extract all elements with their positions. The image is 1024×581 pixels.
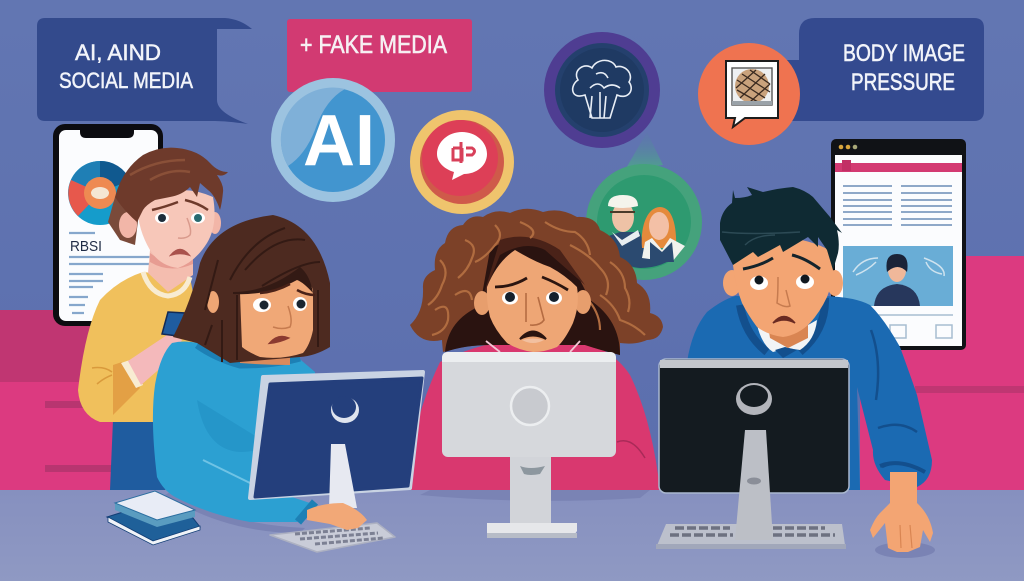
brows xyxy=(152,200,208,210)
monitor stand right xyxy=(735,430,773,540)
brows xyxy=(260,284,315,295)
banner: AI and social media: AI, AIND xyxy=(75,40,161,65)
icon: orange photo badge xyxy=(698,43,800,145)
icon: couple photo badge xyxy=(586,164,702,280)
person: curly haired girl in pink xyxy=(405,209,663,494)
collar stripes xyxy=(486,341,580,352)
small phone xyxy=(162,312,185,336)
person: boy in yellow sweater xyxy=(78,148,228,490)
nose and mouth xyxy=(273,306,291,328)
nose and mouth xyxy=(526,293,544,325)
icon: AI badge xyxy=(271,78,395,202)
fringe xyxy=(233,267,313,294)
phone with pie chart xyxy=(53,124,163,326)
head xyxy=(137,190,215,268)
icon: AI badge: AI xyxy=(303,101,375,181)
banner: AI and social media: SOCIAL MEDIA xyxy=(59,68,193,93)
banner: fake media: + FAKE MEDIA xyxy=(300,31,447,59)
monitor: silver xyxy=(442,352,616,538)
cuff xyxy=(121,360,143,388)
hand xyxy=(128,333,182,385)
hair xyxy=(115,148,228,222)
sweater xyxy=(153,342,315,490)
collar xyxy=(143,272,190,296)
eyes xyxy=(502,292,518,304)
eyes xyxy=(253,298,271,312)
ears xyxy=(723,270,741,296)
person: boy in blue sweater xyxy=(687,187,932,490)
banner: body image pressure: BODY IMAGE xyxy=(843,40,965,67)
ears xyxy=(474,291,490,315)
girl's arm on table xyxy=(157,460,316,522)
banner: AI and social media xyxy=(37,18,252,124)
face xyxy=(240,277,313,358)
pink wall block left xyxy=(0,310,120,490)
keyboard right xyxy=(656,524,846,549)
icon: red chat badge xyxy=(410,110,514,214)
neck xyxy=(768,325,808,348)
yellow sweater xyxy=(78,272,200,422)
white collar xyxy=(757,320,817,352)
eyes xyxy=(155,212,169,224)
neck xyxy=(148,250,193,292)
hair wave strokes xyxy=(428,222,645,335)
nose and mouth xyxy=(777,277,790,307)
nose and mouth xyxy=(178,218,191,238)
monitor: black xyxy=(659,359,849,493)
banner: fake media xyxy=(287,19,472,92)
banner: body image pressure xyxy=(780,18,984,121)
pie chart xyxy=(68,161,132,225)
sweater xyxy=(687,296,932,490)
back hair xyxy=(108,197,140,245)
beam between badges xyxy=(625,132,663,170)
brows xyxy=(495,277,568,290)
keyboard left xyxy=(270,523,395,552)
jeans xyxy=(110,420,165,490)
neckline xyxy=(740,298,825,352)
pink sweater xyxy=(405,340,660,494)
dark inner hair xyxy=(445,239,620,355)
icon: brain tree badge xyxy=(544,32,660,148)
girl's hand on keyboard xyxy=(307,503,367,530)
ears xyxy=(119,212,137,238)
desk xyxy=(0,490,1024,581)
pink wall block right xyxy=(860,256,1024,490)
right hand on table xyxy=(870,463,933,552)
phone with pie chart: RBSI xyxy=(70,238,102,255)
books xyxy=(107,491,200,545)
head xyxy=(733,238,833,337)
hair strands xyxy=(205,228,320,362)
hair back xyxy=(173,215,330,363)
person: girl in blue sweater xyxy=(153,215,330,490)
photo of person xyxy=(843,246,953,306)
neck xyxy=(240,340,290,365)
banner: body image pressure: PRESSURE xyxy=(851,69,955,96)
hair xyxy=(720,187,842,270)
monitor: navy back xyxy=(250,372,423,508)
ear xyxy=(207,291,219,313)
eyes xyxy=(750,276,768,290)
tablet with article xyxy=(831,139,966,350)
brows xyxy=(743,255,820,269)
face xyxy=(487,250,578,352)
curly hair xyxy=(410,209,663,355)
